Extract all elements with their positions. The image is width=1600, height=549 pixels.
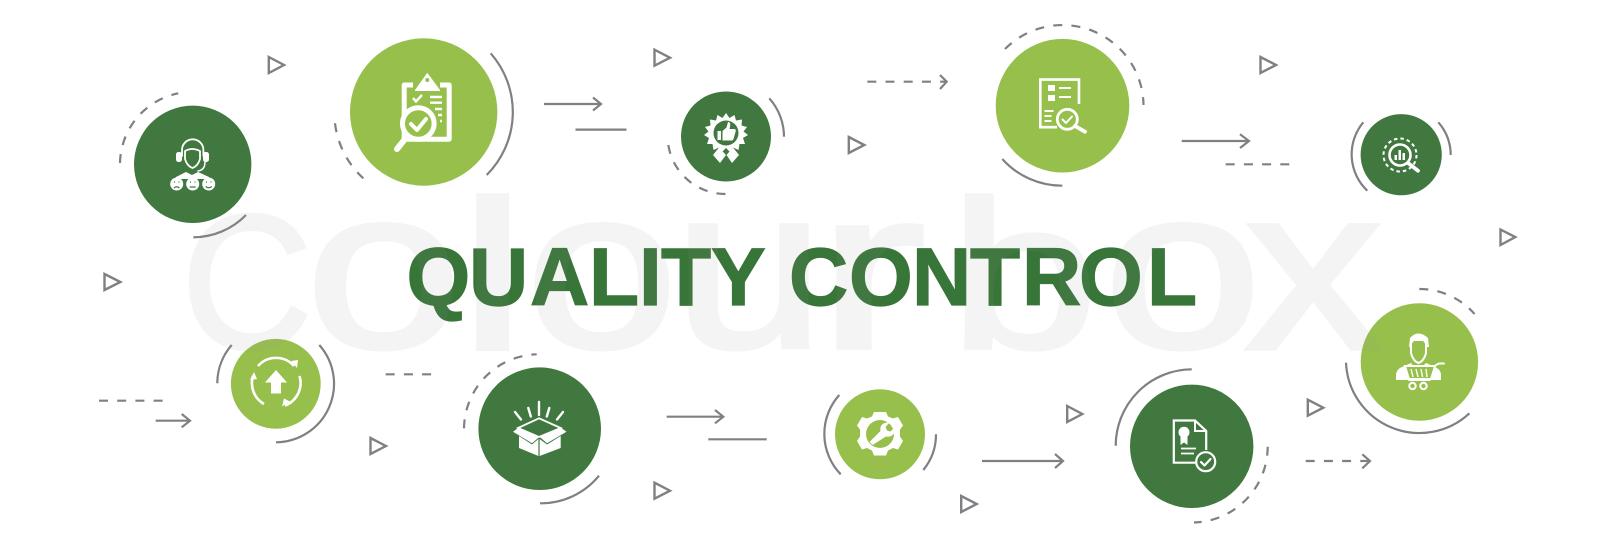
icon: open box with rays bbox=[513, 402, 566, 456]
step: inspection clipboard bbox=[335, 38, 513, 186]
step: product box bbox=[464, 354, 601, 503]
step: customer feedback bbox=[120, 93, 251, 237]
arrow: top right bbox=[1182, 134, 1290, 164]
step: certificate approval bbox=[1116, 369, 1268, 522]
decorative triangle markers bbox=[104, 50, 1515, 512]
arrow: dashed lower right bbox=[1306, 454, 1370, 468]
watermark: C bbox=[182, 177, 312, 389]
step: checklist review bbox=[996, 25, 1144, 186]
watermark: r bbox=[817, 142, 926, 396]
arrow: lower middle bbox=[667, 410, 767, 439]
watermark: o bbox=[526, 141, 678, 396]
icon: headset agent with faces bbox=[170, 139, 215, 190]
icon: gear with wrench bbox=[857, 412, 903, 456]
watermark: x bbox=[1245, 138, 1382, 398]
icon: up arrow in cycle bbox=[250, 358, 301, 406]
step: continuous improvement bbox=[217, 339, 334, 442]
step: maintenance gear bbox=[824, 389, 936, 479]
arrow: dashed top centre bbox=[867, 75, 947, 89]
watermark: o bbox=[306, 142, 462, 396]
icon: document with magnifier bbox=[1040, 80, 1085, 132]
title: QUALITY CONTROL bbox=[406, 232, 1197, 323]
step: analytics search bbox=[1352, 114, 1451, 195]
step: customer with cart bbox=[1346, 289, 1478, 433]
icon: magnifier with chart bbox=[1384, 138, 1418, 172]
watermark bbox=[182, 138, 1382, 398]
dashed line: between lower circles bbox=[386, 373, 432, 375]
watermark: o bbox=[1104, 141, 1262, 396]
watermark: l bbox=[459, 157, 526, 394]
arrow: top after clipboard bbox=[544, 98, 626, 130]
icon: certificate with check bbox=[1174, 420, 1215, 471]
arrow: before certificate bbox=[982, 454, 1063, 468]
watermark: b bbox=[949, 158, 1098, 393]
watermark: u bbox=[673, 140, 825, 396]
icon: person with shopping cart bbox=[1396, 334, 1444, 389]
icon: rosette with thumbs up bbox=[704, 113, 748, 163]
step: approval badge bbox=[668, 92, 784, 194]
icon: clipboard with magnifier bbox=[397, 73, 449, 149]
arrow: lower left bbox=[99, 401, 190, 427]
